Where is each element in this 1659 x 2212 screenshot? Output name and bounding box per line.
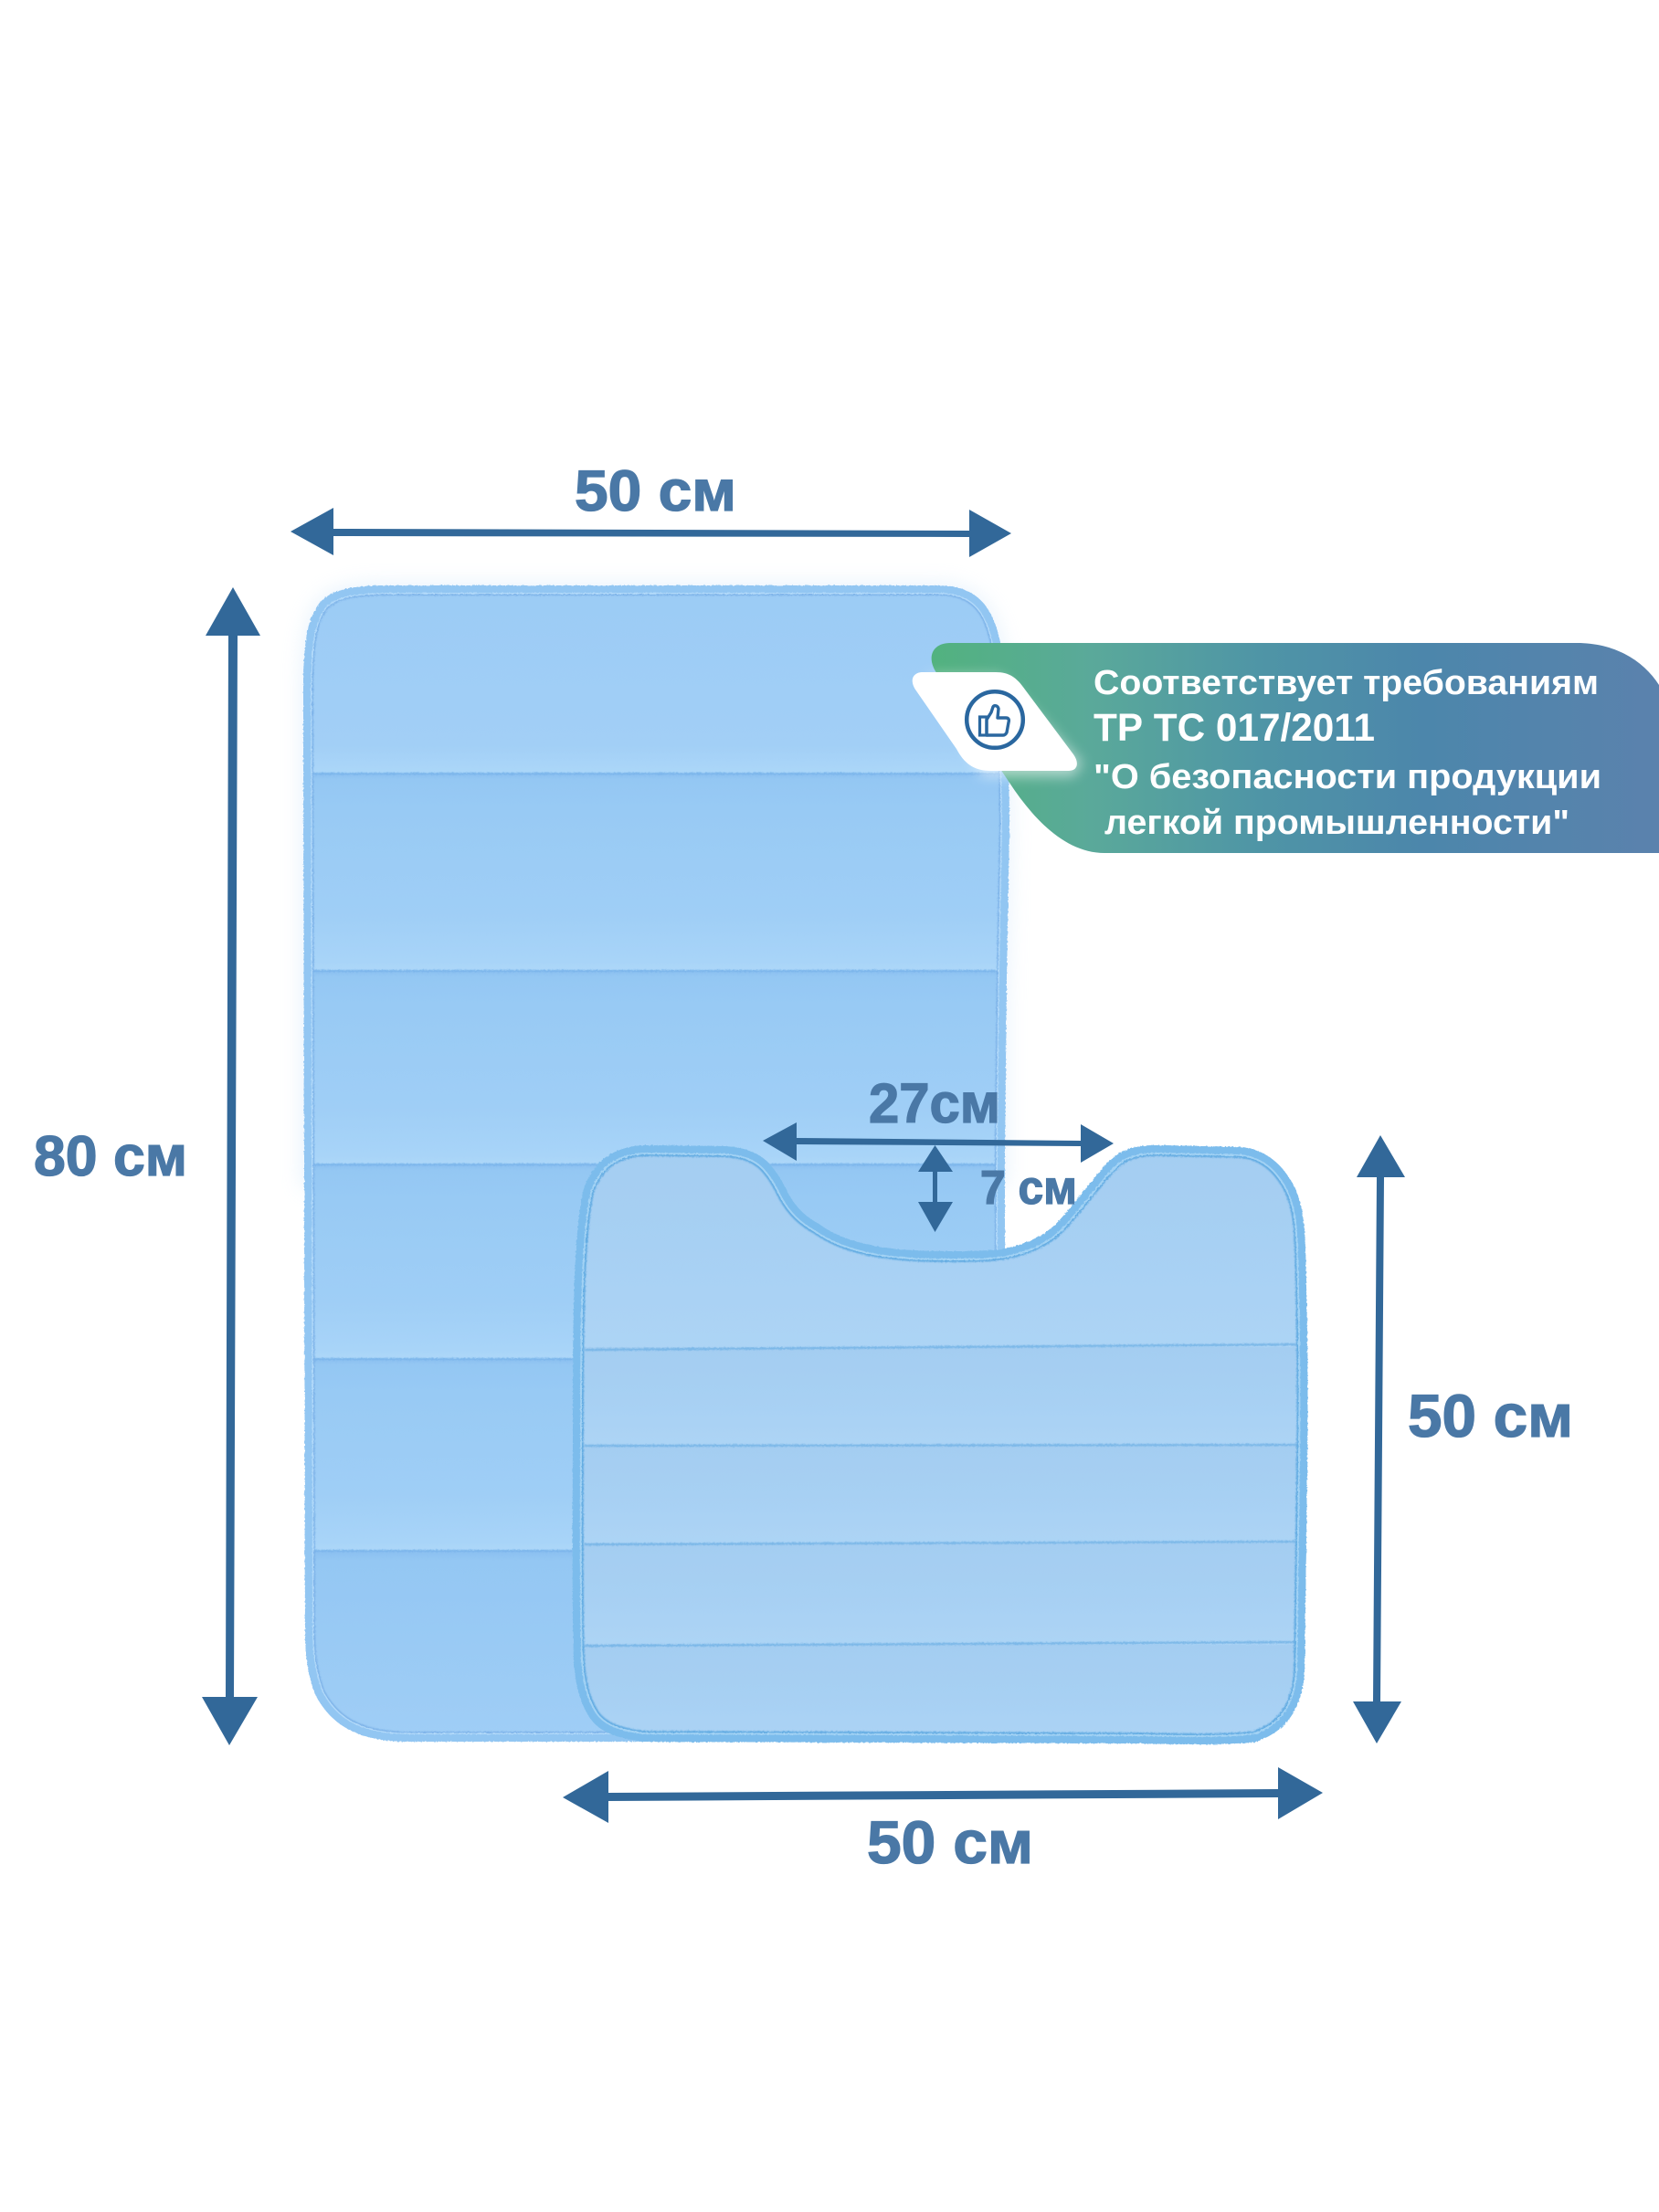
- white icon card: [913, 672, 1077, 771]
- icon: thumbs up: [967, 691, 1023, 748]
- arrow: large mat height: [202, 587, 260, 1745]
- badge text: легкой промышленности": [1104, 804, 1569, 842]
- arrow: contour mat height: [1353, 1135, 1405, 1743]
- callout: compliance badge: [913, 643, 1659, 853]
- label: large mat width 50 cm: 50 см: [575, 459, 736, 523]
- panel: large bath mat: [297, 580, 1019, 1747]
- badge text: ТР ТС 017/2011: [1094, 706, 1375, 750]
- panel: contour toilet mat: [566, 1142, 1316, 1747]
- label: notch depth 7 cm: 7 см: [980, 1162, 1077, 1215]
- label: large mat height 80 cm: 80 см: [34, 1125, 187, 1188]
- badge text: Соответствует требованиям: [1094, 664, 1599, 702]
- label: notch width 27 cm: 27см: [869, 1072, 1000, 1134]
- arrow: contour mat width: [563, 1767, 1323, 1823]
- arrow: notch width: [763, 1122, 1114, 1163]
- badge text: "О безопасности продукции: [1094, 758, 1601, 796]
- badge background: [932, 643, 1659, 853]
- badge text: [1094, 664, 1601, 842]
- arrow: notch depth: [918, 1145, 953, 1232]
- label: contour mat width 50 cm: 50 см: [867, 1808, 1033, 1876]
- label: contour mat height 50 cm: 50 см: [1408, 1382, 1573, 1449]
- white icon card glow: [927, 676, 1083, 776]
- arrow: large mat width: [291, 508, 1011, 557]
